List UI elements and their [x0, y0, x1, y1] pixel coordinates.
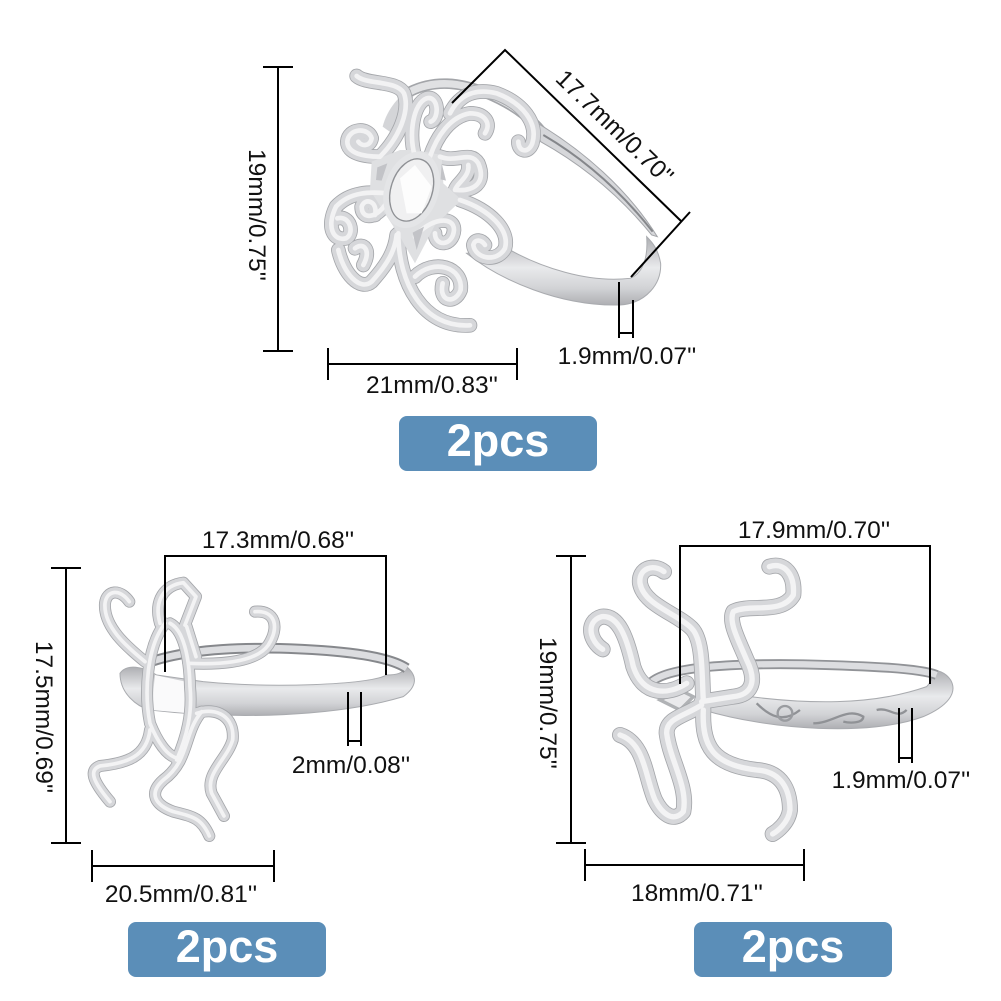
- ring 2 band thickness dimension: [292, 692, 410, 779]
- ring 1 band thickness dimension: [558, 282, 696, 370]
- ring 1 diagonal dimension: 17.7mm/0.70'': [550, 65, 678, 190]
- band of ring 3: [650, 664, 953, 729]
- ring 2 inner width dimension: 17.3mm/0.68'': [202, 527, 354, 554]
- ring 1 width dimension: [328, 348, 517, 399]
- quantity badge: ring 3: [694, 921, 892, 977]
- ring 1 diagonal dimension: [452, 50, 690, 277]
- ring 2: simple tentacle ring: [94, 583, 414, 836]
- band of ring 2: [120, 648, 414, 715]
- ring 1 band thickness dimension: 1.9mm/0.07'': [558, 343, 696, 370]
- quantity badge: ring 3: 2pcs: [742, 921, 844, 972]
- ring 3: wavy tentacle ring: [591, 566, 953, 834]
- ring 2 width dimension: [92, 850, 274, 908]
- ring 1 width dimension: 21mm/0.83'': [366, 372, 498, 399]
- ring 3 inner width dimension: [680, 517, 930, 684]
- quantity badge: ring 1: 2pcs: [447, 415, 549, 466]
- ring 2 inner width dimension: [165, 527, 386, 675]
- ring 3 inner width dimension: 17.9mm/0.70'': [738, 517, 890, 544]
- motif hub: [370, 150, 462, 263]
- ring 3 band thickness dimension: 1.9mm/0.07'': [832, 767, 970, 794]
- ring 2 height dimension: [30, 568, 81, 843]
- ring 1 height dimension: [243, 67, 293, 351]
- ring 2 height dimension: 17.5mm/0.69'': [30, 641, 57, 793]
- tentacles of ring 2: [94, 583, 275, 836]
- ring 1 height dimension: 19mm/0.75'': [243, 149, 270, 281]
- ring 2 band thickness dimension: 2mm/0.08'': [292, 752, 410, 779]
- ring 2 width dimension: 20.5mm/0.81'': [105, 881, 257, 908]
- ring 3 width dimension: 18mm/0.71'': [631, 880, 763, 907]
- ring 3 band thickness dimension: [832, 708, 970, 794]
- ring 1: spiral motif ring: [331, 76, 661, 325]
- tentacles of ring 3: [591, 566, 793, 834]
- quantity badge: ring 2: 2pcs: [176, 921, 278, 972]
- ring 3 width dimension: [585, 849, 804, 907]
- motif of ring 1: [331, 76, 534, 325]
- quantity badge: ring 2: [128, 921, 326, 977]
- ring 3 height dimension: [534, 556, 586, 843]
- quantity badge: ring 1: [399, 415, 597, 471]
- band of ring 1: [383, 84, 661, 305]
- ring 3 height dimension: 19mm/0.75'': [534, 637, 561, 769]
